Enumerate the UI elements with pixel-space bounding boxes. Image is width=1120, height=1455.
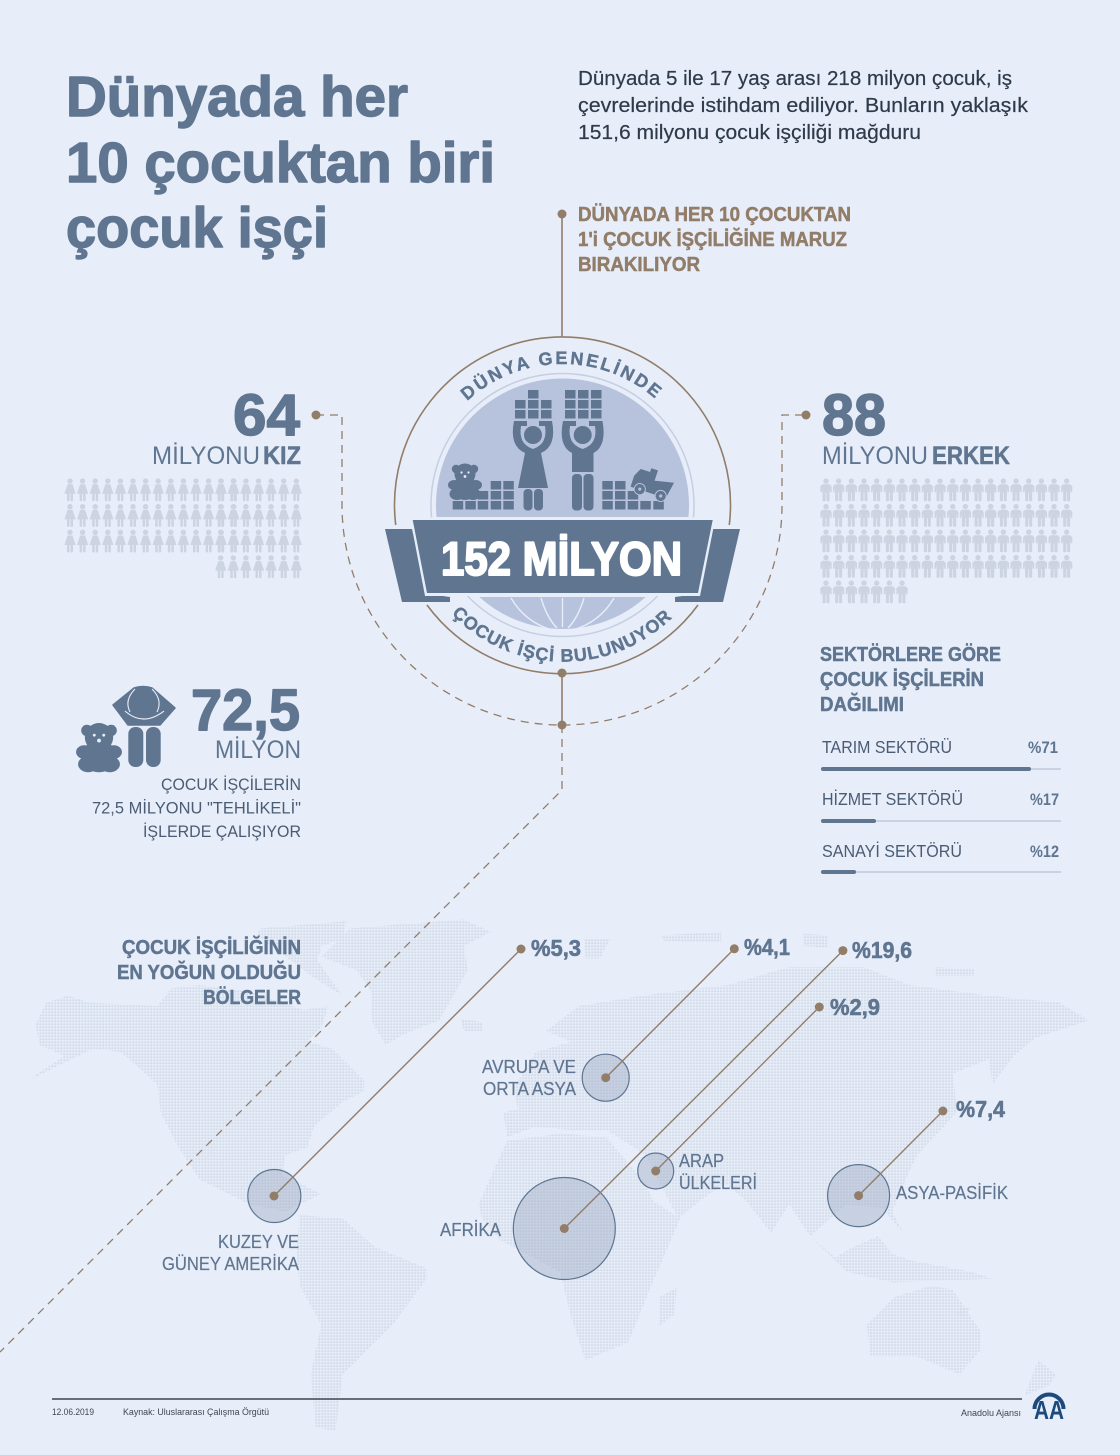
region: Africa: AFRİKA [440, 1220, 501, 1240]
icon: girl carrying bricks [513, 390, 553, 510]
region: Africa [440, 937, 912, 1280]
region: Arab countries [638, 994, 880, 1193]
region: Americas: %5,3 [531, 935, 581, 961]
stat: 64 million girls [152, 383, 301, 470]
text: hazardous work: İŞLERDE ÇALIŞIYOR [143, 822, 301, 841]
dotted world map [30, 919, 1089, 1431]
curved text bottom: ÇOCUK İŞÇİ BULUNUYOR [452, 608, 672, 664]
banner number: 152 MİLYON [441, 532, 682, 585]
stat: 64 million girls: 64 [233, 383, 300, 448]
region: Asia-Pacific: %7,4 [956, 1096, 1005, 1122]
title [66, 65, 495, 260]
callout heading: 1'i ÇOCUK İŞÇİLİĞİNE MARUZ [578, 227, 847, 251]
map heading: ÇOCUK İŞÇİLİĞİNİN [122, 935, 301, 959]
icon: teddy bear [76, 723, 122, 772]
curved text top: DÜNYA GENELİNDE [460, 351, 662, 400]
badge: 152 milyon [385, 336, 740, 674]
stat: 88 million boys: 88 [822, 383, 886, 448]
sectors heading: DAĞILIMI [820, 692, 904, 716]
region: Europe and Central Asia: ORTA ASYA [483, 1079, 576, 1099]
sector bar: industry: %12 [1030, 842, 1059, 861]
title: 10 çocuktan biri [66, 131, 495, 195]
callout heading: BIRAKILIYOR [578, 254, 701, 276]
region: Asia-Pacific [828, 1096, 1008, 1227]
icon: teddy bear [448, 464, 482, 500]
region: Americas: KUZEY VE [218, 1232, 299, 1252]
text: hazardous work [92, 775, 301, 841]
connector: callout to badge [558, 210, 566, 337]
region: Asia-Pacific: ASYA-PASİFİK [896, 1183, 1008, 1203]
footer: Kaynak: Uluslararası Çalışma Örgütü [123, 1407, 269, 1417]
sector bar: industry [821, 841, 1061, 874]
sector bar: agriculture [821, 737, 1061, 771]
region: Arab countries: ÜLKELERİ [679, 1173, 757, 1193]
stat: 88 million boys [822, 383, 1010, 470]
sector bar: services: HİZMET SEKTÖRÜ [822, 789, 963, 809]
stat: 88 million boys: MİLYONU [822, 441, 928, 470]
icon: sad child [113, 686, 175, 767]
icon: toy truck [629, 465, 675, 504]
stat: 72,5 million: MİLYON [215, 735, 301, 764]
sectors heading [820, 643, 1001, 716]
region: Americas: GÜNEY AMERİKA [162, 1254, 299, 1274]
map heading: BÖLGELER [203, 986, 301, 1009]
region: Americas [162, 935, 581, 1274]
pictogram: girls [64, 478, 302, 578]
icon: bricks left [453, 481, 514, 510]
text: hazardous work: 72,5 MİLYONU "TEHLİKELİ" [92, 798, 301, 818]
icon: boy carrying bricks [562, 390, 604, 510]
region: Europe and Central Asia: AVRUPA VE [482, 1057, 576, 1077]
sector bar: services [821, 789, 1061, 823]
sector bar: industry: SANAYİ SEKTÖRÜ [822, 841, 962, 861]
footer [52, 1399, 1022, 1418]
connector dots below badge [312, 410, 810, 730]
map heading: EN YOĞUN OLDUĞU [117, 960, 301, 984]
stat: 88 million boys: ERKEK [932, 442, 1010, 470]
intro paragraph [578, 68, 1029, 144]
stat: 64 million girls: MİLYONU [152, 441, 260, 470]
region: Europe and Central Asia [482, 934, 790, 1101]
sector bar: agriculture: TARIM SEKTÖRÜ [822, 737, 952, 757]
badge inner disc [431, 374, 694, 636]
icon: bricks right [602, 481, 664, 510]
text: hazardous work: ÇOCUK İŞÇİLERİN [161, 775, 301, 794]
sectors heading: SEKTÖRLERE GÖRE [820, 643, 1001, 666]
pictogram: boys [820, 478, 1072, 603]
intro paragraph: Dünyada 5 ile 17 yaş arası 218 milyon çocuk, iş [578, 68, 1012, 90]
region: Arab countries: %2,9 [830, 994, 880, 1020]
stat: 72,5 million: 72,5 [191, 678, 300, 743]
intro paragraph: çevrelerinde istihdam ediliyor. Bunların yaklaşık [578, 95, 1029, 117]
title: çocuk işçi [66, 196, 328, 260]
sector bar: agriculture: %71 [1028, 738, 1058, 757]
footer: 12.06.2019 [52, 1407, 94, 1417]
icon: AA logo: AA [1034, 1395, 1064, 1425]
region: Africa: %19,6 [852, 937, 912, 963]
region: Europe and Central Asia: %4,1 [744, 934, 790, 960]
sectors heading: ÇOCUK İŞÇİLERİN [820, 668, 984, 691]
stat: 64 million girls: KIZ [263, 442, 301, 470]
map heading [117, 935, 301, 1009]
region: Arab countries: ARAP [679, 1151, 724, 1171]
callout heading [578, 203, 851, 276]
footer: Anadolu Ajansı [961, 1408, 1021, 1418]
title: Dünyada her [66, 65, 408, 129]
sector bar: services: %17 [1030, 790, 1059, 809]
dashed connectors [0, 415, 806, 1352]
ribbon [385, 518, 740, 602]
intro paragraph: 151,6 milyonu çocuk işçiliği mağduru [578, 122, 921, 144]
badge outer ring [395, 337, 730, 674]
callout heading: DÜNYADA HER 10 ÇOCUKTAN [578, 203, 851, 226]
